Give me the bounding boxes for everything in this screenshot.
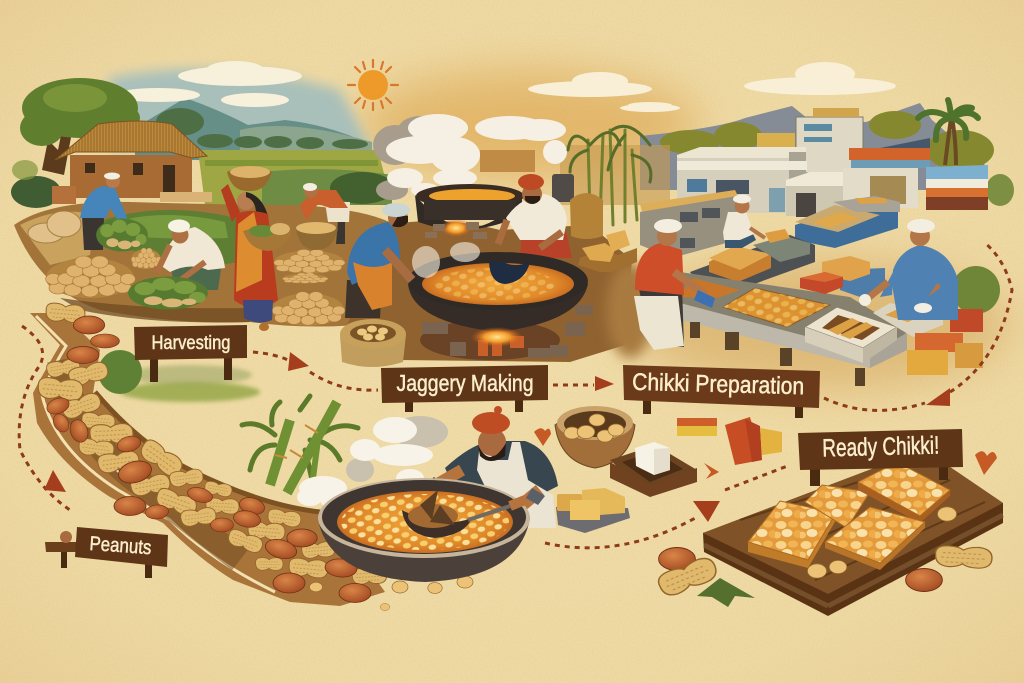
worker: blue shirt harvester: [80, 172, 148, 252]
dotted journey path: [19, 243, 1012, 548]
chikki bar two: [805, 485, 870, 528]
sugarcane bundle: [242, 396, 358, 493]
sacks left: [28, 211, 81, 243]
sugarcane stand top: [568, 126, 651, 225]
lower worker with turban: [420, 406, 558, 528]
chikki production line: [678, 196, 943, 386]
sign: Peanuts: [45, 527, 168, 578]
sign: Harvesting: [134, 325, 247, 382]
red-skinned peanuts on track: [45, 316, 371, 602]
peanut piles: [46, 248, 345, 326]
worker: orange shirt with basket: [296, 183, 350, 250]
sign: Ready Chikki: [798, 429, 963, 486]
icon: sun: [348, 60, 398, 110]
chikki bar three: [858, 462, 950, 523]
chikki bar four: [825, 507, 925, 570]
worker: apron at chikki tray: [634, 219, 715, 350]
sack of peanuts: [340, 319, 406, 367]
worker: blue shirt stirrer: [345, 203, 412, 318]
top steam: [373, 114, 567, 200]
worker: white shirt with red turban: [498, 174, 637, 272]
sign: Harvesting: Harvesting: [152, 333, 230, 354]
landscape: right sky and hills: [480, 62, 1014, 206]
lower steam: [297, 416, 448, 508]
sign: Jaggery Making: [381, 365, 548, 412]
cutting board with chikki: [703, 462, 1003, 616]
thatched hut: [52, 121, 212, 204]
sign: Chikki Preparation: [623, 365, 820, 418]
boxes stack right: [907, 266, 1000, 375]
landscape: left hills and fields: [108, 61, 394, 205]
top cauldron with fire: [415, 184, 524, 239]
red box stack: [677, 417, 782, 465]
butter block on tray: [610, 442, 697, 497]
steam at main pan: [412, 242, 480, 278]
worker: back of factory: [723, 194, 765, 248]
factory buildings: [640, 108, 988, 258]
soil under cauldrons: [345, 221, 654, 362]
chikki bar one: [748, 501, 836, 568]
soil: harvest field: [14, 202, 405, 402]
sign: Peanuts: Peanuts: [89, 533, 152, 559]
sign: Chikki Preparation: Chikki Preparation: [632, 369, 805, 400]
worker: kneeling white shirt: [128, 220, 225, 310]
bowl of peanuts: [555, 406, 635, 468]
lower pan with peanuts: [318, 478, 530, 582]
peanut shells on track: [37, 302, 387, 585]
palm tree: [918, 100, 978, 165]
chikki blocks on tray: [556, 488, 630, 533]
worker: blue uniform: [859, 219, 958, 320]
arrowheads: [44, 352, 950, 522]
main jaggery pan: [408, 252, 593, 360]
sign: Jaggery Making: Jaggery Making: [396, 370, 534, 396]
loose peanuts near board: [656, 507, 993, 607]
worker: woman with basket: [221, 166, 292, 331]
small arrow and hearts: [534, 428, 997, 479]
peanut track: [30, 302, 473, 611]
sign: Ready Chikki: Ready Chikki!: [822, 431, 940, 463]
tree: [11, 78, 140, 208]
